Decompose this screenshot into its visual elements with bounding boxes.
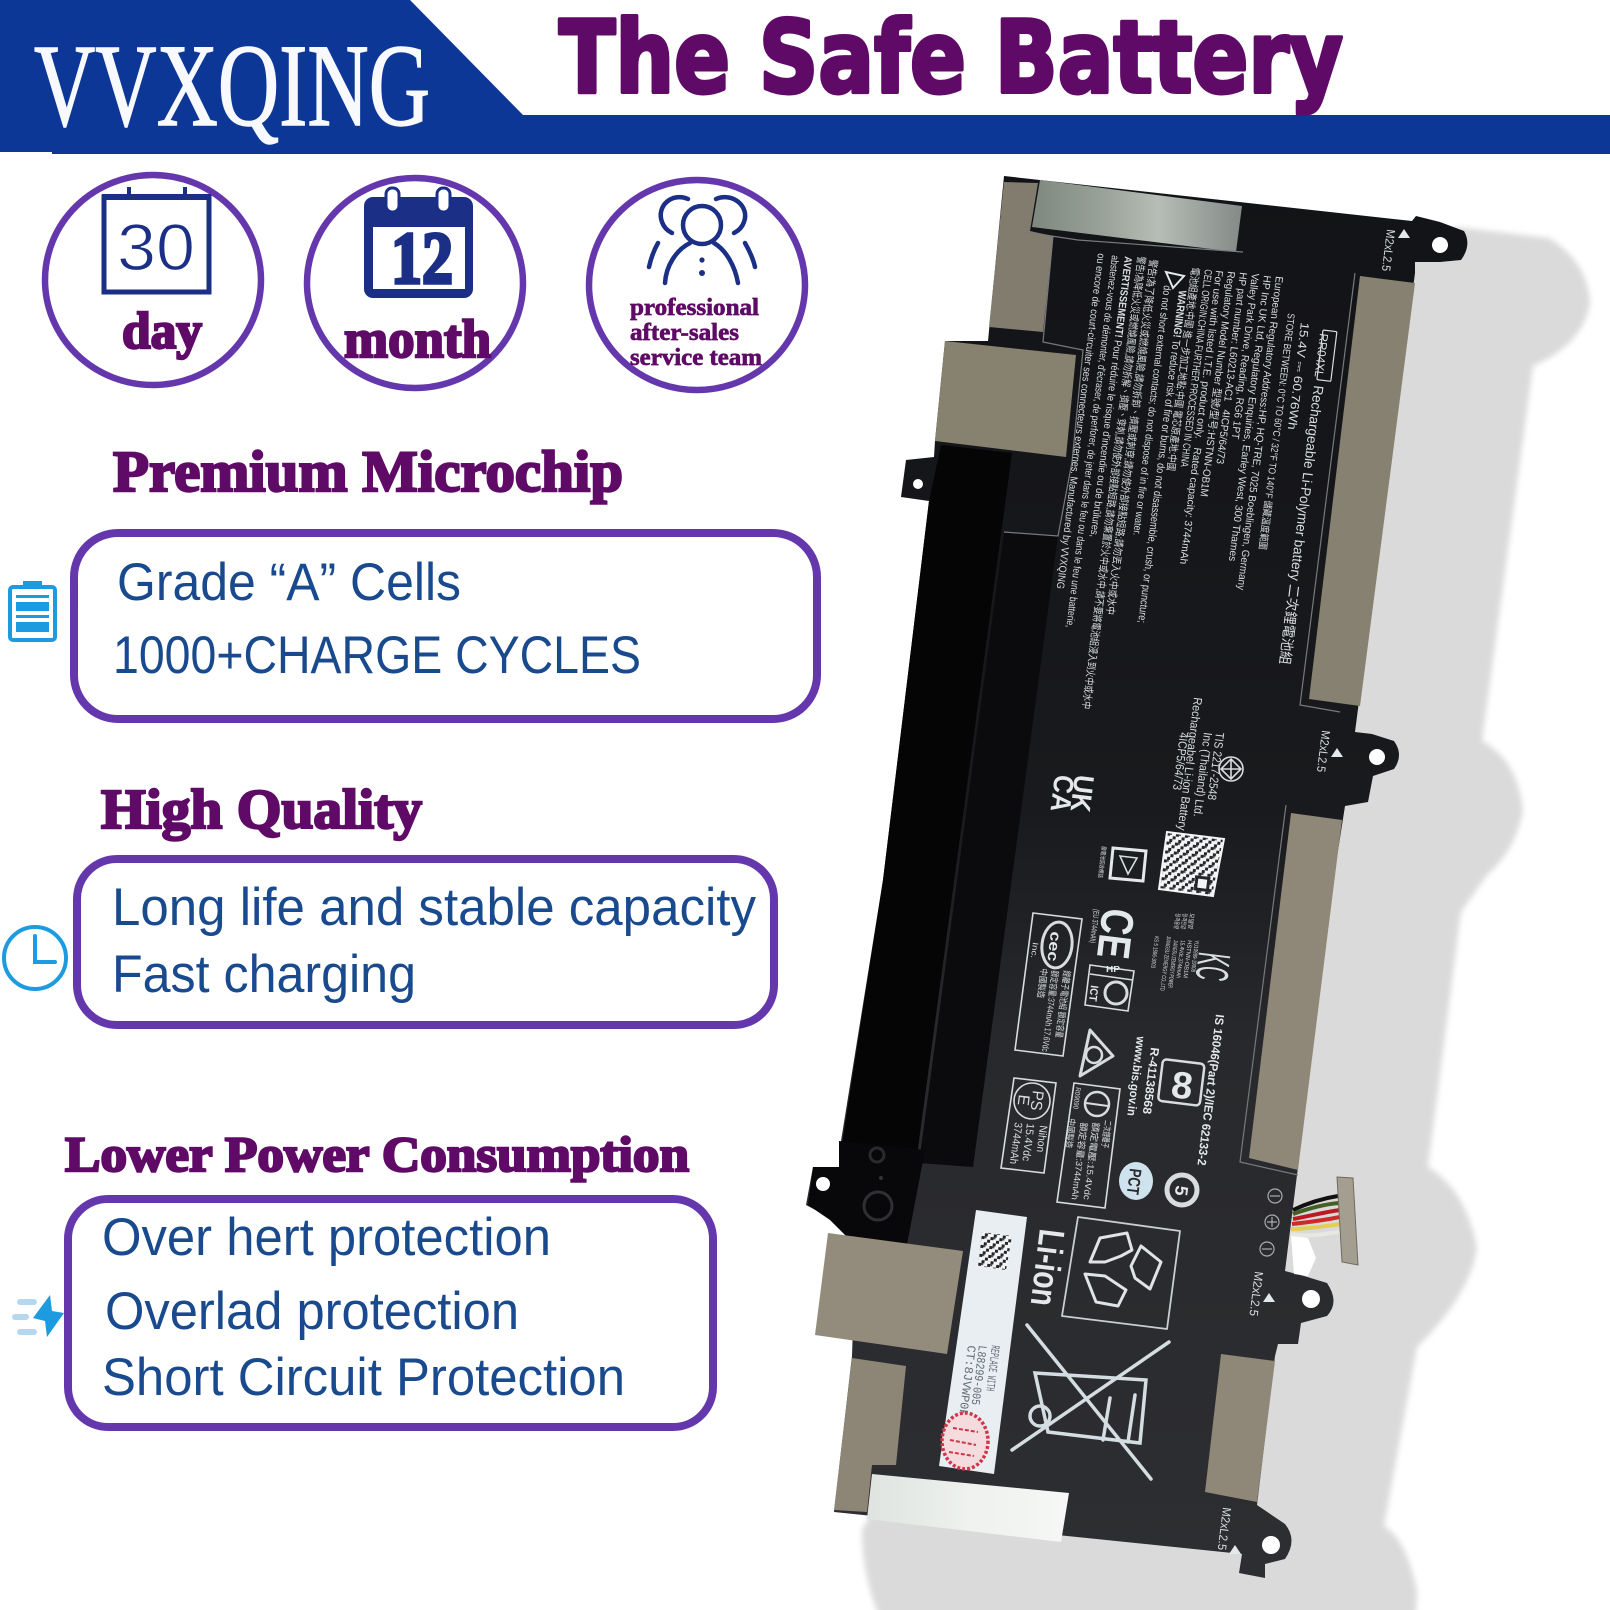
warning label text: CELL ORIGIN:CHINA FURTHER PROCESSED IN CHINA (1178, 269, 1214, 468)
ICT box: ICT (1086, 985, 1100, 1002)
PSE box: 3744mAh (1007, 1122, 1024, 1165)
CEC box (1015, 913, 1082, 1056)
RoHS box (1057, 1083, 1120, 1208)
tape: top left (989, 182, 1053, 332)
icon: lightning (12, 1295, 64, 1337)
panel: power (68, 1199, 713, 1427)
warning label text: 電池組產地:中國 進一步加工地點:中國 電芯原產地:中國 (1164, 267, 1202, 472)
warning label text: ou encore de court-circuiter ses connecteurs externes. Manufactured by VVXQING (1054, 253, 1107, 590)
label: team text: service team (630, 345, 762, 371)
RoHS box: R09090 (1071, 1087, 1081, 1110)
text: life: Long life and stable capacity (112, 878, 756, 937)
KC text and mark: JIANGSU ZENERGY POWER (1166, 940, 1178, 989)
mounting holes (816, 237, 1448, 1554)
Li-ion label: Li-ion (1023, 1227, 1073, 1308)
Thailand certification text: 4ICP5/64/73 (1170, 732, 1191, 791)
Thailand certification text: Rechargeabel Li-ion Battery (1175, 697, 1205, 831)
text: overload: Overlad protection (105, 1282, 519, 1341)
RoHS box: 二次鋰離子 (1100, 1120, 1114, 1149)
badge: after-sales team (589, 180, 805, 390)
panel: microchip (74, 533, 817, 719)
CEC box: 額定容量:3744mAh 17.6Vdc (1040, 970, 1061, 1053)
warning label text (1054, 253, 1337, 710)
BIS certification: 8 (1169, 1064, 1195, 1109)
CEC box: 鋰離子電池組 額定容量 (1054, 970, 1073, 1039)
data matrix (978, 1232, 1012, 1270)
warning label text: Valley Park Drive, Reading, RG6 1PT (1229, 273, 1261, 440)
KC text and mark: 모델명 (1186, 913, 1196, 930)
battery body (806, 176, 1467, 1578)
battery shadow (862, 227, 1590, 1610)
warning triangle (1166, 272, 1184, 288)
warning label text: HP part number: L60213-AC1 4ICP5/64/73 (1213, 272, 1249, 465)
RCM mark (1080, 1030, 1113, 1076)
BIS certification: IS 16046(Part 2)/IEC 62133-2 (1194, 1014, 1227, 1167)
dark panel (919, 532, 1058, 1167)
text: cells: Grade “A” Cells (117, 553, 461, 612)
KC text and mark: 15.4Vdc,3744mAh (1174, 940, 1185, 978)
screw labels: M2xL2.5 (1379, 229, 1398, 272)
tape outline lines (1004, 236, 1083, 536)
tape: left bulge (935, 341, 1076, 457)
PSE box: 15.4Vdc (1019, 1123, 1036, 1162)
warning label text: do not short external contacts; do not dispose of in fire or water. (1130, 285, 1173, 536)
dark left band (841, 445, 1012, 1163)
warning label text: WARNING! To reduce risk of fire or burns, do not disassemble, crush, or puncture; (1135, 290, 1188, 624)
recycle mark with text: 廢電池回收標誌 (1096, 846, 1108, 878)
text: short circuit: Short Circuit Protection (102, 1348, 625, 1407)
five year mark: 5 (1171, 1185, 1192, 1197)
PSE box: Nihon (1034, 1125, 1049, 1153)
RoHS box: 額定電壓:15.4Vdc (1081, 1122, 1102, 1201)
BIS certification: www.bis.gov.in (1124, 1035, 1148, 1117)
KC text and mark: 정격용량 (1172, 913, 1181, 930)
CEC box: cec (1043, 931, 1064, 962)
PSE box: E (1014, 1094, 1032, 1107)
PSE box: PS (1027, 1090, 1046, 1111)
Thailand certification text: Inc (Thailand) Ltd. (1191, 732, 1215, 818)
icon: battery (10, 581, 55, 640)
CEC box: 中國製造 (1035, 968, 1050, 999)
warning label text: RR04XL (1312, 333, 1331, 378)
tape: bottom right (1205, 1354, 1275, 1502)
UKCA mark: UK (1065, 773, 1100, 814)
crossed-out bin (1012, 1325, 1169, 1479)
bottom silver strip (867, 1474, 1069, 1542)
badge: 12 month (307, 178, 523, 388)
barcode sticker: L88299-005 20 (965, 1345, 989, 1430)
text: cycles: 1000+CHARGE CYCLES (113, 626, 641, 685)
badge: 30 day (45, 175, 261, 385)
CE mark: (EU 3744mAh) (1088, 909, 1101, 944)
KC text and mark: HSTNN-OB1M (1181, 940, 1192, 978)
text: heat: Over hert protection (102, 1208, 551, 1267)
RoHS box: 額定容量:3744mAh (1070, 1122, 1090, 1201)
connector (1337, 1177, 1358, 1265)
heading: Lower Power Consumption: Lower Power Consumption (65, 1126, 689, 1182)
icon: calendar 12 (364, 188, 473, 300)
Thailand certification text (1170, 697, 1243, 831)
heading: Premium Microchip: Premium Microchip (113, 439, 623, 504)
UKCA mark (1045, 773, 1100, 814)
QR code (1159, 832, 1224, 896)
CE mark: CE (1087, 906, 1145, 962)
BIS certification: R-41138568 (1140, 1047, 1162, 1115)
UKCA mark: CA (1045, 773, 1080, 814)
label: team text: professional (630, 295, 759, 321)
HP logo (864, 1148, 892, 1220)
label: team text: after-sales (630, 320, 739, 346)
tape: upper right (1309, 276, 1415, 706)
label: team text (630, 295, 762, 371)
ICT box: HP (1106, 965, 1121, 974)
icon: team (649, 197, 755, 283)
screw labels: M2xL2.5 (1215, 1507, 1234, 1551)
KC text and mark (1149, 913, 1241, 992)
PCT mark (1119, 1162, 1153, 1200)
ICT box (1085, 965, 1134, 1011)
warning label text: Rechargeable Li-Polymer battery 二次鋰電池組 (1277, 385, 1327, 665)
icon: clock (4, 927, 66, 989)
PCT mark: PCT (1123, 1168, 1145, 1196)
label: day: day (122, 303, 202, 360)
wire harness (1291, 1177, 1358, 1276)
warning label text: Regulatory Model Number 型號/型号:HSTNN-OB1M (1197, 271, 1238, 498)
Thailand certification text: TIS 2217-2548 (1205, 732, 1227, 801)
warning label text: For use with listed I.T.E. product only. Rated capacity: 3744mAh (1177, 270, 1225, 565)
terminal markers (1260, 1189, 1282, 1256)
KC text and mark: 정격전압 (1179, 913, 1189, 930)
top silver strip (1032, 180, 1242, 252)
panel: quality (77, 859, 774, 1025)
icon: calendar 30: 30 (117, 210, 195, 284)
barcode sticker: CT:8JVWP0FWPOT (952, 1345, 978, 1445)
text: charging: Fast charging (112, 945, 416, 1004)
header banner (0, 0, 1610, 154)
warning label text: STORE BETWEEN: 0°C TO 60°C / 32°F TO 140°F 儲藏溫度範圍 (1256, 313, 1298, 550)
warning label text: European Regulatory Address:HP, HQ-TRE, 7025 Boeblingen, Germany (1234, 276, 1285, 591)
recycle mark with text (1096, 846, 1146, 881)
screw labels: M2xL2.5 (1314, 730, 1333, 773)
icon: calendar 12: 12 (391, 218, 453, 300)
tape: bottom left (834, 1358, 906, 1512)
icon: calendar 30 (102, 187, 211, 292)
KC text and mark: YU10999-19008 (1189, 940, 1199, 973)
warning label text: 警告!為降低火災或燃燒風險,請勿拆解、擠壓、穿刺,請勿使外部接點短路,請勿棄置於火中或水中,請不要將電池組浸入到火中或水中 (1079, 256, 1148, 710)
heading: High Quality: High Quality (101, 779, 422, 841)
barcode sticker: REPLACE WITH (982, 1345, 1002, 1392)
screw labels (1215, 229, 1410, 1554)
brand name: VVXQING (34, 20, 430, 151)
warning label text: abstenez-vous de démonter, d'écraser, de perforer, de jeter dans le feu ou dans le feu une batterie, (1063, 255, 1121, 628)
screw labels: M2xL2.5 (1247, 1271, 1266, 1317)
title: The Safe Battery (559, 0, 1343, 116)
warning label text: AVERTISSEMENT! Pour réduire le risque d'incendie ou de brûlures, (1088, 256, 1134, 538)
wire wrap (1291, 1236, 1316, 1276)
label: month: month (344, 309, 491, 369)
dark lower left block (808, 1141, 925, 1255)
warning label text: 警告!為了降低火災或燃燒風險,請勿拆卸、擠壓或刺穿;請勿使外部接點短路;請勿丟入火中或水中 (1103, 259, 1160, 616)
warning label text: HP Inc UK Ltd, Regulatory Enquiries, Earley West, 300 Thames (1226, 275, 1273, 562)
warning label text: 15.4V ⎓ 60.76Wh (1285, 322, 1312, 431)
recycling symbol (1062, 1217, 1180, 1329)
KC text and mark: JIANGSU ZENERGY CO.,LTD (1158, 936, 1171, 992)
five year mark (1167, 1175, 1197, 1205)
PSE box (1001, 1078, 1056, 1173)
barcode sticker (939, 1210, 1027, 1474)
KC text and mark: KC (1186, 950, 1241, 984)
tape: mid right (1249, 813, 1342, 1170)
KC text and mark: KS 5 1596-3003 (1149, 936, 1159, 969)
CEC box: Inc. (1029, 942, 1040, 959)
tape: lower left (815, 1233, 963, 1354)
battery (806, 176, 1467, 1578)
RoHS box: 中國製造 (1063, 1118, 1078, 1149)
red stamp (942, 1413, 988, 1469)
BIS certification (1124, 1014, 1227, 1167)
